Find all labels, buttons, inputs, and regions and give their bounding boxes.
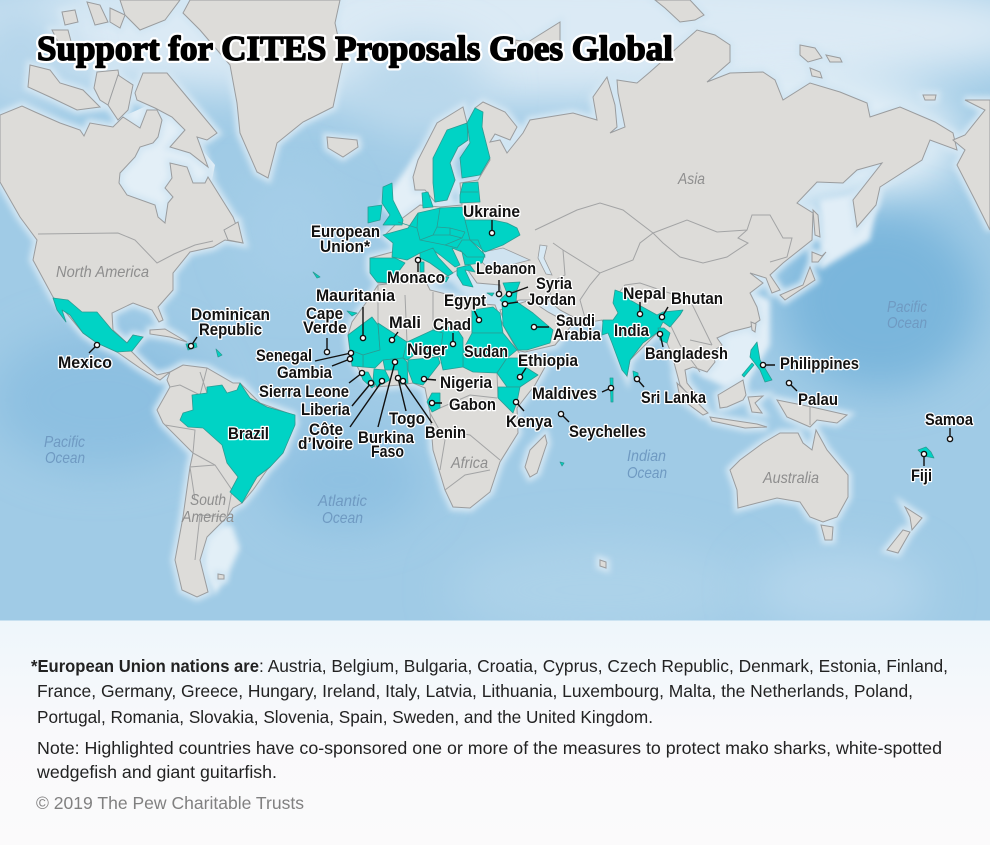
Ireland <box>368 205 382 223</box>
continent labels: South <box>190 492 226 509</box>
country labels: Sudan <box>464 343 508 361</box>
Bangladesh <box>658 328 670 343</box>
Brazil <box>180 383 295 503</box>
Saudi Arabia <box>502 302 553 350</box>
ocean labels: Ocean <box>45 450 85 467</box>
Atlantic and Indian Ocean islands <box>313 272 320 278</box>
Italy <box>420 248 453 276</box>
Burkina Faso, Togo, Benin <box>383 358 408 384</box>
country labels: Maldives <box>532 385 597 403</box>
continent labels: North America <box>56 264 149 281</box>
country labels: Jordan <box>527 291 576 309</box>
country labels: Brazil <box>228 425 269 443</box>
land masses <box>0 0 990 597</box>
highlighted countries note <box>36 738 942 782</box>
title: Support for CITES Proposals Goes Global <box>37 29 673 68</box>
Baltic states <box>460 182 480 203</box>
country labels: Mali <box>389 314 421 332</box>
ocean labels: Indian <box>627 448 666 465</box>
country labels: Samoa <box>925 411 974 429</box>
country labels: Togo <box>389 410 425 428</box>
United Kingdom <box>382 183 403 225</box>
Fiji <box>918 447 934 458</box>
European Union note <box>31 656 948 727</box>
country labels: Cape <box>306 305 343 323</box>
ocean labels: Ocean <box>322 510 363 527</box>
country labels: Arabia <box>553 326 602 344</box>
European internal borders <box>392 192 485 258</box>
country labels: Niger <box>407 341 448 359</box>
continent labels <box>56 171 819 526</box>
country labels: Syria <box>536 275 573 293</box>
country labels: Gambia <box>277 364 333 382</box>
country labels: Sierra Leone <box>259 383 349 401</box>
Ukraine <box>465 220 520 252</box>
country labels: Gabon <box>449 396 496 414</box>
highlighted countries note: Note: Highlighted countries have co-sponsored one or more of the measures to protect mako sharks, white-spotted <box>37 738 942 758</box>
ocean labels <box>44 299 927 527</box>
Sweden <box>433 123 468 202</box>
European Union note: *European Union nations are <box>31 656 259 676</box>
Greece <box>457 265 475 287</box>
Senegal and Gambia <box>350 350 363 367</box>
inland seas and gray borders <box>38 203 810 560</box>
country labels: Union* <box>320 238 371 256</box>
country labels: Bangladesh <box>645 345 728 363</box>
country labels: Seychelles <box>569 423 646 441</box>
leader lines and location dots <box>89 220 953 466</box>
copyright: © 2019 The Pew Charitable Trusts <box>36 793 304 813</box>
continental shelf glow <box>0 0 990 597</box>
Cote d'Ivoire <box>373 369 390 387</box>
country labels: Egypt <box>444 292 486 310</box>
Dominican Republic <box>186 343 197 350</box>
ocean labels: Pacific <box>44 434 85 451</box>
country labels: Saudi <box>556 312 595 330</box>
ocean labels: Pacific <box>887 299 927 316</box>
country labels: Nigeria <box>440 374 493 392</box>
country labels: Kenya <box>506 413 553 431</box>
highlighted countries <box>53 108 934 503</box>
Gabon <box>427 393 440 412</box>
country labels: Palau <box>798 391 838 409</box>
European Union note: France, Germany, Greece, Hungary, Ireland, Italy, Latvia, Lithuania, Luxembourg, Malta, the Netherlands, Poland, <box>37 681 913 701</box>
country labels: Philippines <box>780 355 859 373</box>
country labels: Liberia <box>301 401 351 419</box>
Nigeria <box>408 357 440 385</box>
country labels: Monaco <box>387 269 445 287</box>
Mali <box>363 323 407 368</box>
Spain and Portugal <box>370 258 405 283</box>
European Union note: Portugal, Romania, Slovakia, Slovenia, Spain, Sweden, and the United Kingdom. <box>37 707 653 727</box>
continent labels: Asia <box>677 171 705 188</box>
India <box>602 290 683 376</box>
country labels: Sri Lanka <box>641 389 707 407</box>
ocean labels: Ocean <box>887 315 927 332</box>
Sri Lanka <box>633 371 638 380</box>
country labels: d’Ivoire <box>298 435 353 453</box>
ocean labels: Atlantic <box>317 493 367 510</box>
country labels: Ethiopia <box>518 352 579 370</box>
country labels: Mauritania <box>316 287 396 305</box>
continent labels: America <box>181 509 234 526</box>
notes panel background <box>0 620 990 845</box>
Mexico <box>53 298 143 352</box>
country labels: Faso <box>371 443 404 461</box>
country labels: Chad <box>433 316 471 334</box>
Denmark <box>422 192 433 208</box>
country labels: European <box>311 223 380 241</box>
country labels: Ukraine <box>463 203 520 221</box>
Kenya <box>498 387 520 413</box>
highlighted countries note: wedgefish and giant guitarfish. <box>36 762 277 782</box>
Egypt <box>472 307 503 333</box>
country labels: Senegal <box>256 347 312 365</box>
European Union mainland <box>383 207 485 267</box>
country labels: Nepal <box>623 285 666 303</box>
Sierra Leone and Liberia <box>360 372 375 388</box>
European Union note: : Austria, Belgium, Bulgaria, Croatia, Cyprus, Czech Republic, Denmark, Estonia, Finland, <box>259 656 948 676</box>
country labels: Côte <box>309 421 343 439</box>
country labels: Mexico <box>58 354 112 372</box>
Syria <box>503 282 520 293</box>
country labels: Bhutan <box>671 290 723 308</box>
country labels: Fiji <box>911 467 932 485</box>
Chad <box>433 326 463 370</box>
Mauritania <box>348 317 380 355</box>
title: Support for CITES Proposals Goes Global <box>37 29 673 68</box>
country labels <box>58 203 974 485</box>
Sardinia, Sicily and Cyprus <box>420 262 494 296</box>
Sudan <box>463 333 517 373</box>
country labels: India <box>614 322 650 340</box>
ocean labels: Ocean <box>627 465 667 482</box>
country labels: Verde <box>303 319 347 337</box>
continent labels: Australia <box>762 470 819 487</box>
Maldives <box>610 378 613 402</box>
country labels: Dominican <box>191 306 270 324</box>
Ethiopia <box>497 358 538 387</box>
country labels: Burkina <box>358 429 415 447</box>
map background: ocean <box>0 0 990 640</box>
Jordan <box>500 292 517 303</box>
Niger <box>403 330 443 360</box>
country labels: Lebanon <box>476 260 536 278</box>
country labels: Republic <box>199 321 262 339</box>
Finland <box>460 108 490 178</box>
continent labels: Africa <box>450 455 488 472</box>
Philippines <box>750 342 772 382</box>
country labels: Benin <box>425 424 466 442</box>
